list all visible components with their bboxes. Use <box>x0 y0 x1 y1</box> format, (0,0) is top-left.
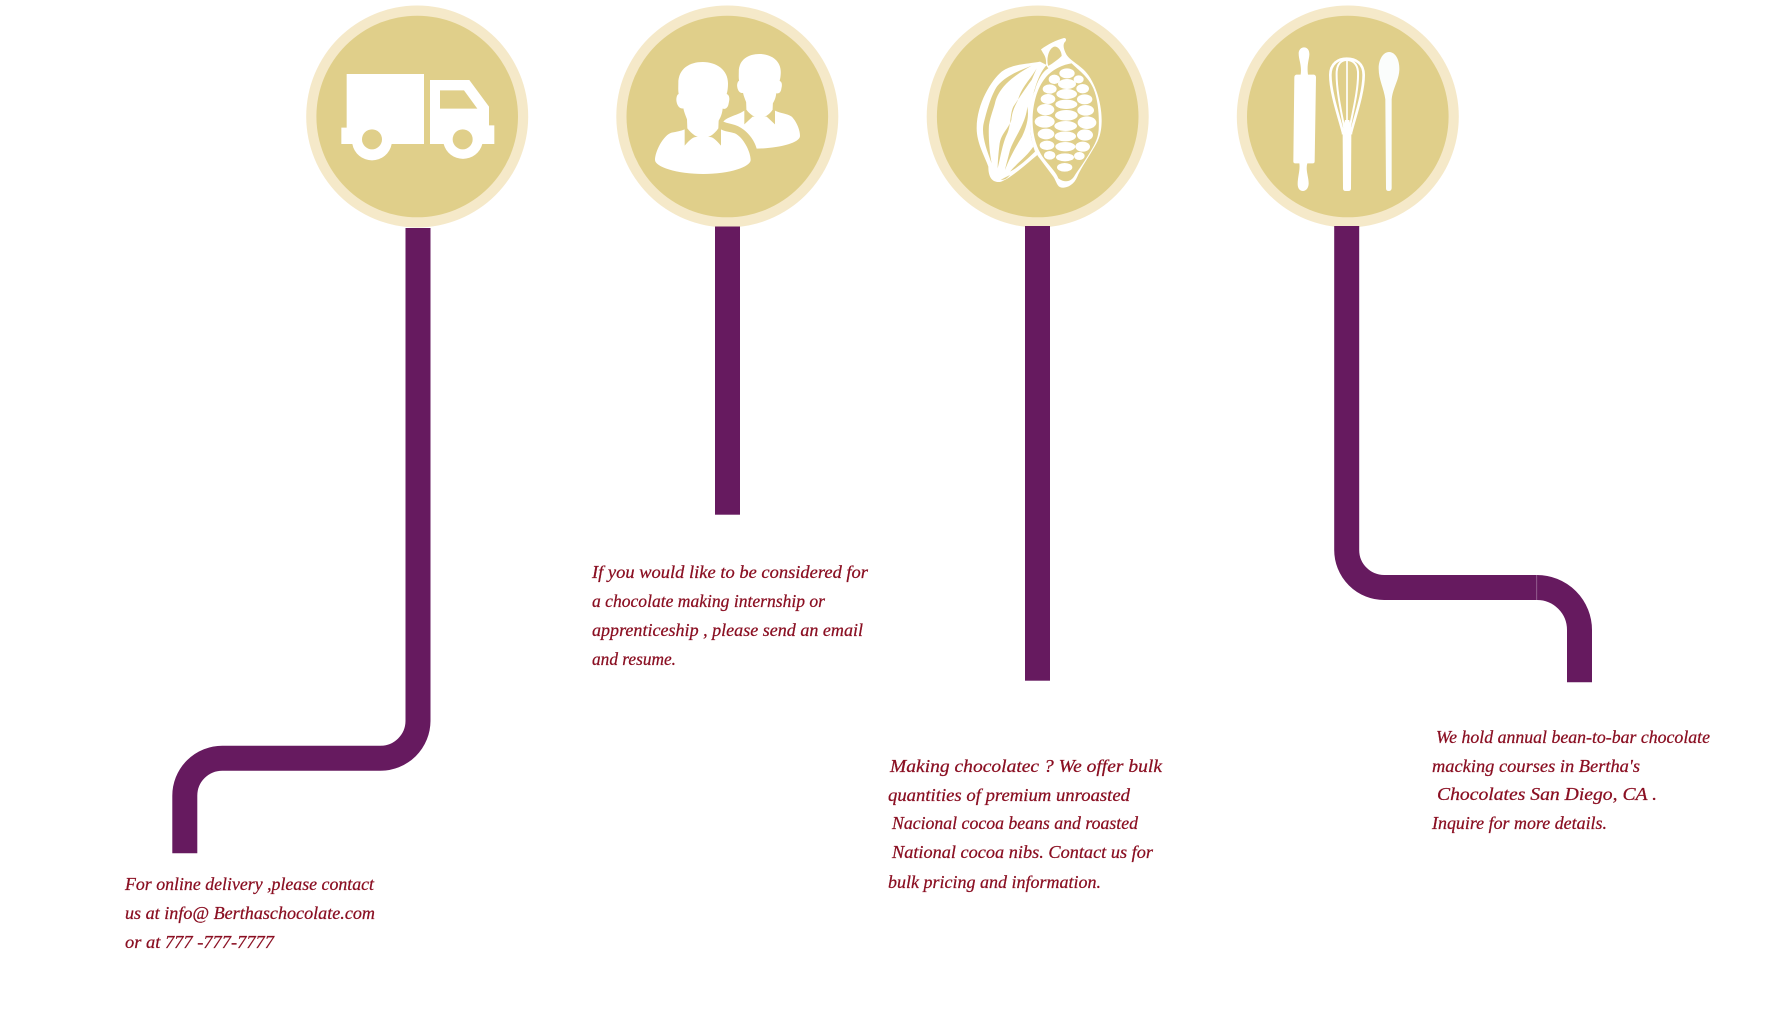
text block: cocoa: National cocoa nibs. Contact us for <box>891 842 1154 862</box>
text block: delivery <box>124 874 375 952</box>
panel: courses <box>1237 6 1710 833</box>
panel: internship <box>591 6 869 669</box>
connector line: delivery <box>185 228 418 853</box>
text block: internship: apprenticeship , please send an email <box>592 620 863 640</box>
text block: courses: Chocolates San Diego, CA . <box>1437 784 1657 804</box>
icon: cocoa pod badge <box>927 6 1149 228</box>
connector line: internship <box>715 226 740 515</box>
text block: courses: Inquire for more details. <box>1431 813 1607 833</box>
text block: cocoa: quantities of premium unroasted <box>888 785 1131 805</box>
text block: cocoa: Nacional cocoa beans and roasted <box>891 813 1139 833</box>
text block: delivery: For online delivery ,please contact <box>124 874 375 894</box>
text block: delivery: us at info@ Berthaschocolate.com <box>125 903 375 923</box>
text block: cocoa: bulk pricing and information. <box>888 872 1101 892</box>
connector line: cocoa <box>1025 226 1050 681</box>
text block: internship: a chocolate making internship or <box>592 591 826 611</box>
text block: delivery: or at 777 -777-7777 <box>125 932 275 952</box>
text block: cocoa: Making chocolatec ? We offer bulk <box>889 756 1163 776</box>
icon: people badge <box>616 6 838 228</box>
icon: truck badge <box>306 6 528 228</box>
icon: baking tools badge <box>1237 6 1459 228</box>
text block: courses <box>1431 727 1710 833</box>
panel: online delivery <box>124 6 528 952</box>
text block: internship: and resume. <box>592 649 676 669</box>
text block: courses: macking courses in Bertha's <box>1432 756 1640 776</box>
text block: internship: If you would like to be considered for <box>591 562 869 582</box>
text block: internship <box>591 562 869 669</box>
panel: cocoa beans <box>888 6 1163 892</box>
text block: cocoa <box>888 756 1163 892</box>
connector line: courses <box>1347 226 1580 682</box>
text block: courses: We hold annual bean-to-bar chocolate <box>1436 727 1710 747</box>
